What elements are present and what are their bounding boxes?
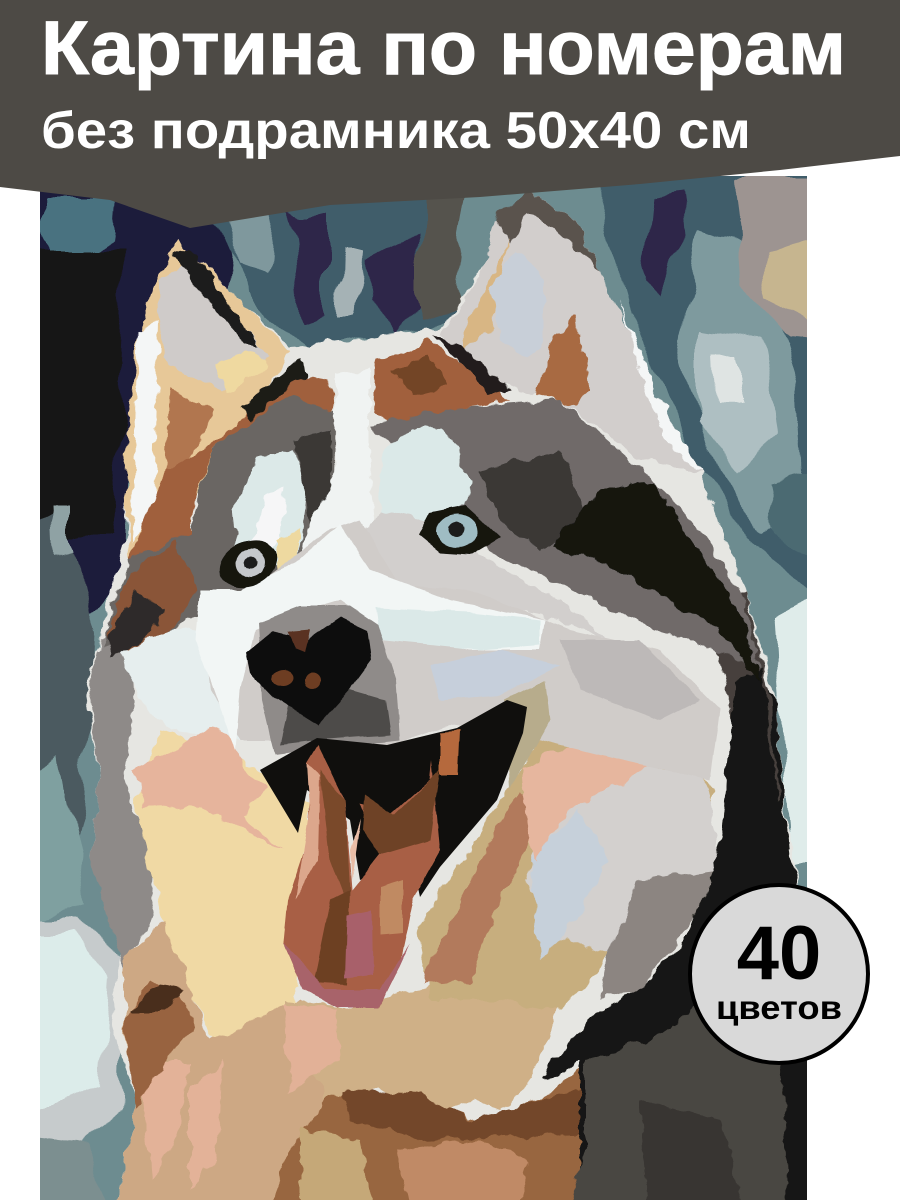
header banner xyxy=(0,0,900,228)
right cheek fur xyxy=(416,740,716,1010)
black eye patch xyxy=(552,480,762,685)
dog eyes xyxy=(219,505,501,588)
right ear xyxy=(440,192,700,470)
badge number: 40 xyxy=(737,911,821,996)
badge: 40 colours xyxy=(690,885,868,1063)
left cheek grey xyxy=(88,630,155,970)
right brow patch xyxy=(378,425,473,521)
khaki under lip xyxy=(505,680,550,790)
left brow patch xyxy=(232,450,308,570)
title: Картина по номерам xyxy=(41,6,846,91)
badge label: цветов xyxy=(716,989,842,1026)
dog mouth xyxy=(260,700,527,897)
white centre stripe xyxy=(302,368,375,552)
dog head xyxy=(100,192,762,685)
left ear xyxy=(125,240,290,560)
painting background xyxy=(40,176,807,1200)
left eye xyxy=(219,540,278,588)
lower right grey xyxy=(560,1000,790,1200)
lower brown xyxy=(273,1068,582,1200)
brown forehead xyxy=(372,340,510,425)
white muzzle xyxy=(200,520,720,780)
right eye xyxy=(418,505,500,555)
subtitle: без подрамника 50х40 см xyxy=(41,102,751,160)
right neck black xyxy=(542,689,807,1200)
dog tongue xyxy=(283,730,460,1007)
lower spikes xyxy=(285,984,558,1110)
dog nose xyxy=(246,617,372,725)
cream chest xyxy=(135,730,310,1040)
dark brow lines xyxy=(240,358,305,420)
fur silhouette xyxy=(85,192,830,1200)
painting: husky portrait xyxy=(40,176,807,1200)
grey mask xyxy=(372,400,760,670)
grey around nose xyxy=(258,606,400,755)
dog muzzle xyxy=(195,520,720,790)
dog fur xyxy=(85,192,830,1200)
